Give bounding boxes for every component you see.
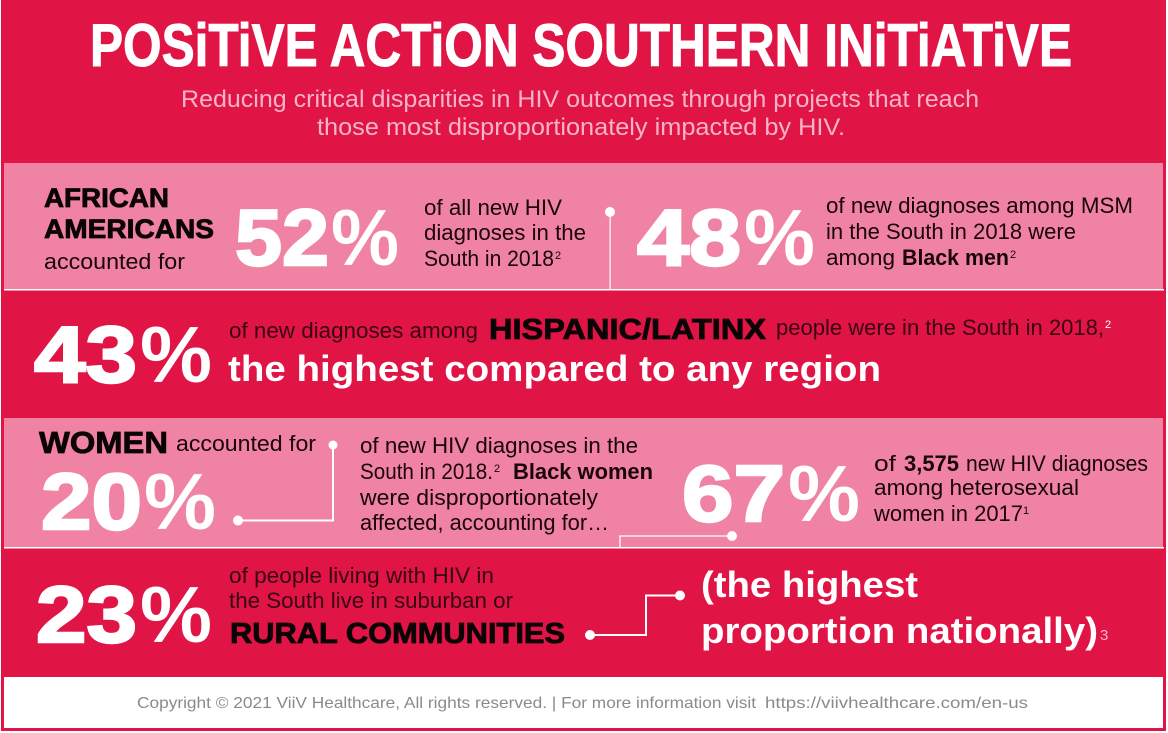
text: MSM diagnoses: of new diagnoses among MSM [826, 193, 1133, 218]
footer: Copyright © 2021 ViiV Healthcare, All rights reserved. | For more information visit [137, 695, 757, 712]
callout: highest proportion nationally: proportion nationally) [701, 610, 1098, 651]
text: MSM diagnoses: Black men [902, 245, 1009, 270]
statistic: 23% [36, 570, 212, 659]
text: heterosexual women: women in 2017 [873, 501, 1023, 526]
statistic: 20%: % [144, 457, 216, 546]
text: all new diagnoses: of all new HIV [424, 195, 562, 220]
statistic: 23%: % [140, 570, 212, 659]
text: heterosexual women: 1 [1023, 505, 1029, 517]
text: Hispanic/Latinx diagnoses: of new diagnoses among [229, 318, 478, 343]
subtitle: Reducing critical disparities in HIV outcomes through projects that reach [181, 86, 979, 113]
text: all new diagnoses [424, 195, 586, 271]
heading: women [39, 425, 317, 460]
heading: African Americans: AFRICAN [44, 183, 169, 213]
text: MSM diagnoses: among [826, 245, 895, 270]
text: MSM diagnoses: in the South in 2018 were [826, 219, 1076, 244]
statistic: 67% [682, 449, 860, 538]
text: Black women: South in 2018. [360, 459, 493, 484]
text: Black women [359, 433, 653, 535]
text: rural communities [229, 563, 565, 650]
divider connector [605, 207, 615, 289]
statistic: 52%: % [331, 193, 399, 282]
text: all new diagnoses: South in 2018 [424, 246, 554, 271]
statistic: 67%: 67 [682, 449, 785, 538]
text: Black women: 2 [494, 463, 500, 475]
statistic: 23%: 23 [36, 570, 137, 659]
footer [4, 677, 1163, 728]
callout: highest proportion nationally: 3 [1100, 627, 1108, 644]
subtitle: those most disproportionately impacted by HIV. [317, 114, 845, 141]
panel: women statistics [4, 418, 1164, 548]
statistic: 43%: 43 [34, 310, 137, 399]
footer: https://viivhealthcare.com/en-us [765, 695, 1028, 712]
statistic: 20%: 20 [41, 457, 142, 546]
text: Hispanic/Latinx diagnoses: HISPANIC/LATINX [489, 314, 767, 346]
text: Hispanic/Latinx diagnoses [229, 314, 1111, 346]
text: Black women: of new HIV diagnoses in the [360, 433, 638, 458]
callout: highest proportion nationally: (the highest [701, 564, 918, 605]
statistic: 43%: % [140, 310, 212, 399]
text: rural communities: RURAL COMMUNITIES [230, 618, 565, 650]
text: Hispanic/Latinx diagnoses: people were in the South in 2018, [776, 315, 1104, 340]
text: rural communities: the South live in suburban or [229, 588, 514, 613]
connector: 67% to next panel [620, 531, 737, 547]
text: heterosexual women: among heterosexual [874, 475, 1079, 500]
text: Black women: affected, accounting for… [360, 510, 609, 535]
heading: African Americans: accounted for [44, 249, 186, 274]
connector: 20% to text [233, 440, 338, 526]
subtitle [181, 86, 979, 141]
text: MSM diagnoses: 2 [1010, 249, 1016, 261]
text: heterosexual women: new HIV diagnoses [966, 451, 1148, 476]
panel: Hispanic/Latinx statistic [34, 310, 1111, 399]
text: heterosexual women: of [874, 451, 897, 476]
heading: women: WOMEN [39, 425, 168, 460]
callout: highest of any region: the highest compared to any region [228, 348, 881, 389]
statistic: 52% [235, 193, 399, 282]
text: all new diagnoses: 2 [555, 250, 561, 262]
panel: rural communities statistic [36, 563, 1108, 659]
text: MSM diagnoses [826, 193, 1133, 270]
callout: highest proportion nationally [701, 564, 1108, 651]
statistic: 48%: % [744, 193, 815, 282]
statistic: 48% [637, 193, 815, 282]
text: Hispanic/Latinx diagnoses: 2 [1105, 319, 1111, 331]
statistic: 52%: 52 [235, 193, 329, 282]
connector: rural to highest proportion [585, 590, 685, 640]
statistic: 43% [34, 310, 212, 399]
text: rural communities: of people living with HIV in [229, 563, 494, 588]
heading: African Americans [44, 183, 214, 274]
text: Black women: Black women [513, 459, 653, 484]
statistic: 48%: 48 [637, 193, 741, 282]
text: heterosexual women [873, 451, 1148, 526]
panel: African American statistics [4, 163, 1164, 290]
statistic: 20% [41, 457, 216, 546]
text: heterosexual women: 3,575 [904, 451, 959, 476]
text: Black women: were disproportionately [359, 485, 599, 510]
statistic: 67%: % [788, 449, 860, 538]
heading: African Americans: AMERICANS [44, 214, 214, 244]
heading: women: accounted for [176, 431, 317, 456]
text: all new diagnoses: diagnoses in the [424, 220, 586, 245]
